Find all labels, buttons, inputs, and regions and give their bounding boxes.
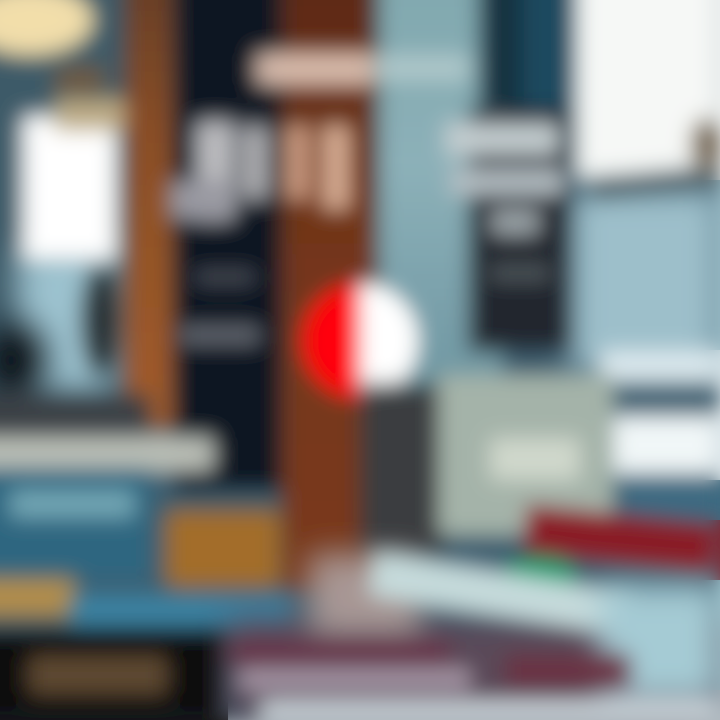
red and white circle [302,283,418,399]
papers and desk [228,552,720,720]
dark panel with text [445,110,570,350]
right window [570,0,720,520]
red book [523,505,717,573]
green item [504,556,576,596]
navy column [170,0,283,490]
mug [165,510,280,588]
teal column [378,0,575,390]
brown right column [255,0,470,590]
left stack of books [0,395,290,627]
brown left column [125,0,175,430]
grey box [360,375,613,555]
left wall and window [0,0,160,450]
ceiling lamp [0,0,140,130]
dark box with label [0,630,225,720]
